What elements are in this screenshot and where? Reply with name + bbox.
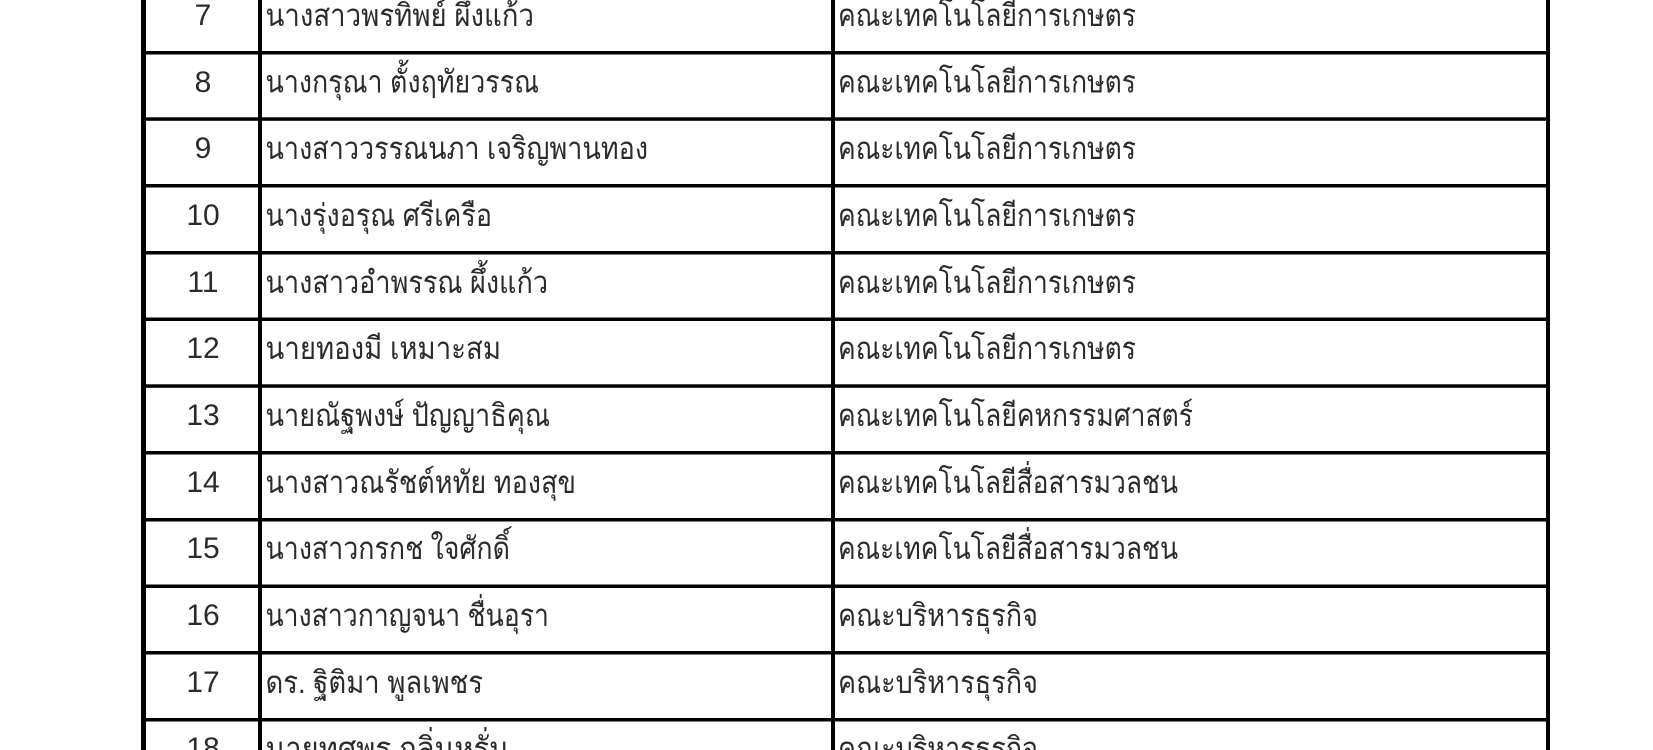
row 15 <box>186 525 1178 566</box>
row 11: 11 <box>187 266 219 299</box>
row 9 <box>195 131 1136 166</box>
row 9: 9 <box>195 132 211 165</box>
row 12: คณะเทคโนโลยีการเกษตร <box>838 331 1136 366</box>
row 15: คณะเทคโนโลยีสื่อสารมวลชน <box>838 527 1178 566</box>
row 13 <box>186 398 1193 435</box>
row 14: นางสาวณรัชต์หทัย ทองสุข <box>266 465 576 502</box>
row 10: คณะเทคโนโลยีการเกษตร <box>838 198 1136 233</box>
row 14 <box>186 461 1178 502</box>
row 14: คณะเทคโนโลยีสื่อสารมวลชน <box>838 461 1178 500</box>
row 9: นางสาววรรณนภา เจริญพานทอง <box>266 131 648 166</box>
row 15: 15 <box>186 532 220 565</box>
row 15: นางสาวกรกช ใจศักดิ์ <box>266 525 512 566</box>
row 13: นายณัฐพงษ์ ปัญญาธิคุณ <box>266 398 550 435</box>
row 8 <box>195 60 1136 102</box>
row 11 <box>187 260 1136 300</box>
row 13: คณะเทคโนโลยีคหกรรมศาสตร์ <box>838 398 1193 433</box>
row 16: คณะบริหารธุรกิจ <box>838 598 1038 635</box>
row 8: คณะเทคโนโลยีการเกษตร <box>838 64 1136 100</box>
row 10: 10 <box>186 199 220 232</box>
row 17 <box>186 665 1038 702</box>
row 9: คณะเทคโนโลยีการเกษตร <box>838 131 1136 166</box>
row 7 <box>195 0 1136 33</box>
row 16: นางสาวกาญจนา ชื่นอุรา <box>266 594 549 635</box>
row 17: ดร. ฐิติมา พูลเพชร <box>266 665 483 701</box>
row 10: นางรุ่งอรุณ ศรีเครือ <box>266 198 492 235</box>
row 18 <box>186 727 1038 750</box>
row 17: 17 <box>186 666 220 699</box>
row 10 <box>186 198 1136 235</box>
row 8: 8 <box>195 66 211 99</box>
row 12: นายทองมี เหมาะสม <box>266 331 501 366</box>
row 14: 14 <box>186 466 220 499</box>
row 17: คณะบริหารธุรกิจ <box>838 665 1038 702</box>
row 11: คณะเทคโนโลยีการเกษตร <box>838 265 1136 300</box>
row 16 <box>186 594 1038 635</box>
row 13: 13 <box>186 399 220 432</box>
row 12 <box>186 331 1136 366</box>
row 12: 12 <box>186 332 220 365</box>
row 8: นางกรุณา ตั้งฤทัยวรรณ <box>266 60 539 102</box>
row 11: นางสาวอำพรรณ ผึ้งแก้ว <box>266 260 548 300</box>
row 16: 16 <box>186 599 220 632</box>
